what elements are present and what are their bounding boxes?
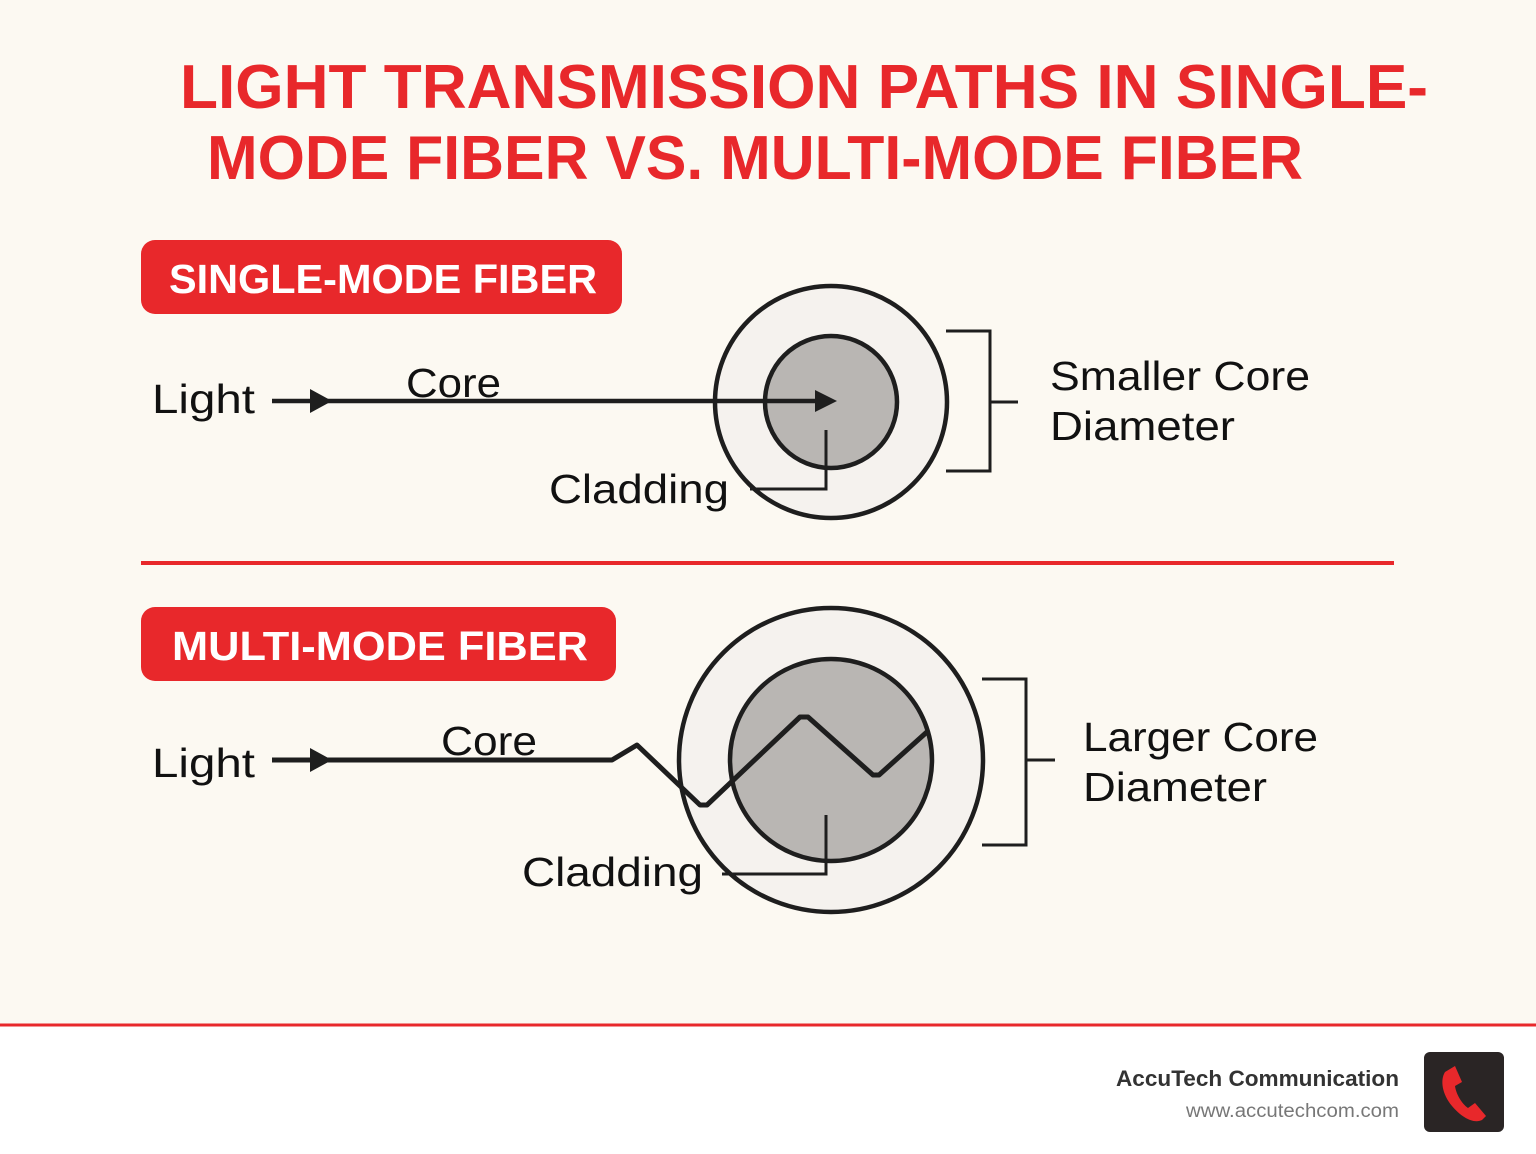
label: smaller core diameter	[1050, 353, 1310, 449]
panel: multi-mode fiber	[141, 607, 1318, 912]
title: LIGHT TRANSMISSION PATHS IN SINGLE-	[180, 53, 1428, 122]
icon: phone logo	[1424, 1052, 1504, 1132]
label: cladding with leader: Cladding	[522, 849, 703, 895]
label: cladding with leader	[522, 815, 826, 895]
label: larger core diameter: Diameter	[1083, 764, 1267, 810]
light path arrow: single-mode	[272, 389, 837, 413]
fiber cross-section: multi-mode	[679, 608, 983, 912]
label: cladding with leader: Cladding	[549, 466, 729, 512]
label: core: Core	[441, 718, 537, 764]
bracket: smaller core	[946, 331, 990, 471]
label: light: Light	[152, 740, 256, 786]
label: smaller core diameter: Smaller Core	[1050, 353, 1310, 399]
title	[180, 53, 1428, 193]
label: core: Core	[406, 360, 501, 406]
label: light: Light	[152, 376, 256, 422]
title: MODE FIBER VS. MULTI-MODE FIBER	[207, 124, 1303, 193]
label: cladding with leader	[549, 430, 826, 512]
label: larger core diameter: Larger Core	[1083, 714, 1318, 760]
footer: company name	[1116, 1066, 1399, 1122]
panel: single-mode fiber	[141, 240, 1310, 518]
footer: company name: AccuTech Communication	[1116, 1066, 1399, 1091]
bracket: larger core	[982, 679, 1026, 845]
fiber cross-section: single-mode	[715, 286, 947, 518]
light path zigzag: multi-mode	[272, 717, 928, 805]
heading pill: multi-mode	[141, 607, 616, 681]
heading pill: single-mode	[141, 240, 622, 314]
heading pill: single-mode: SINGLE-MODE FIBER	[169, 256, 597, 302]
footer: company name: www.accutechcom.com	[1185, 1101, 1399, 1122]
label: larger core diameter	[1083, 714, 1318, 810]
heading pill: multi-mode: MULTI-MODE FIBER	[172, 623, 588, 669]
label: smaller core diameter: Diameter	[1050, 403, 1235, 449]
